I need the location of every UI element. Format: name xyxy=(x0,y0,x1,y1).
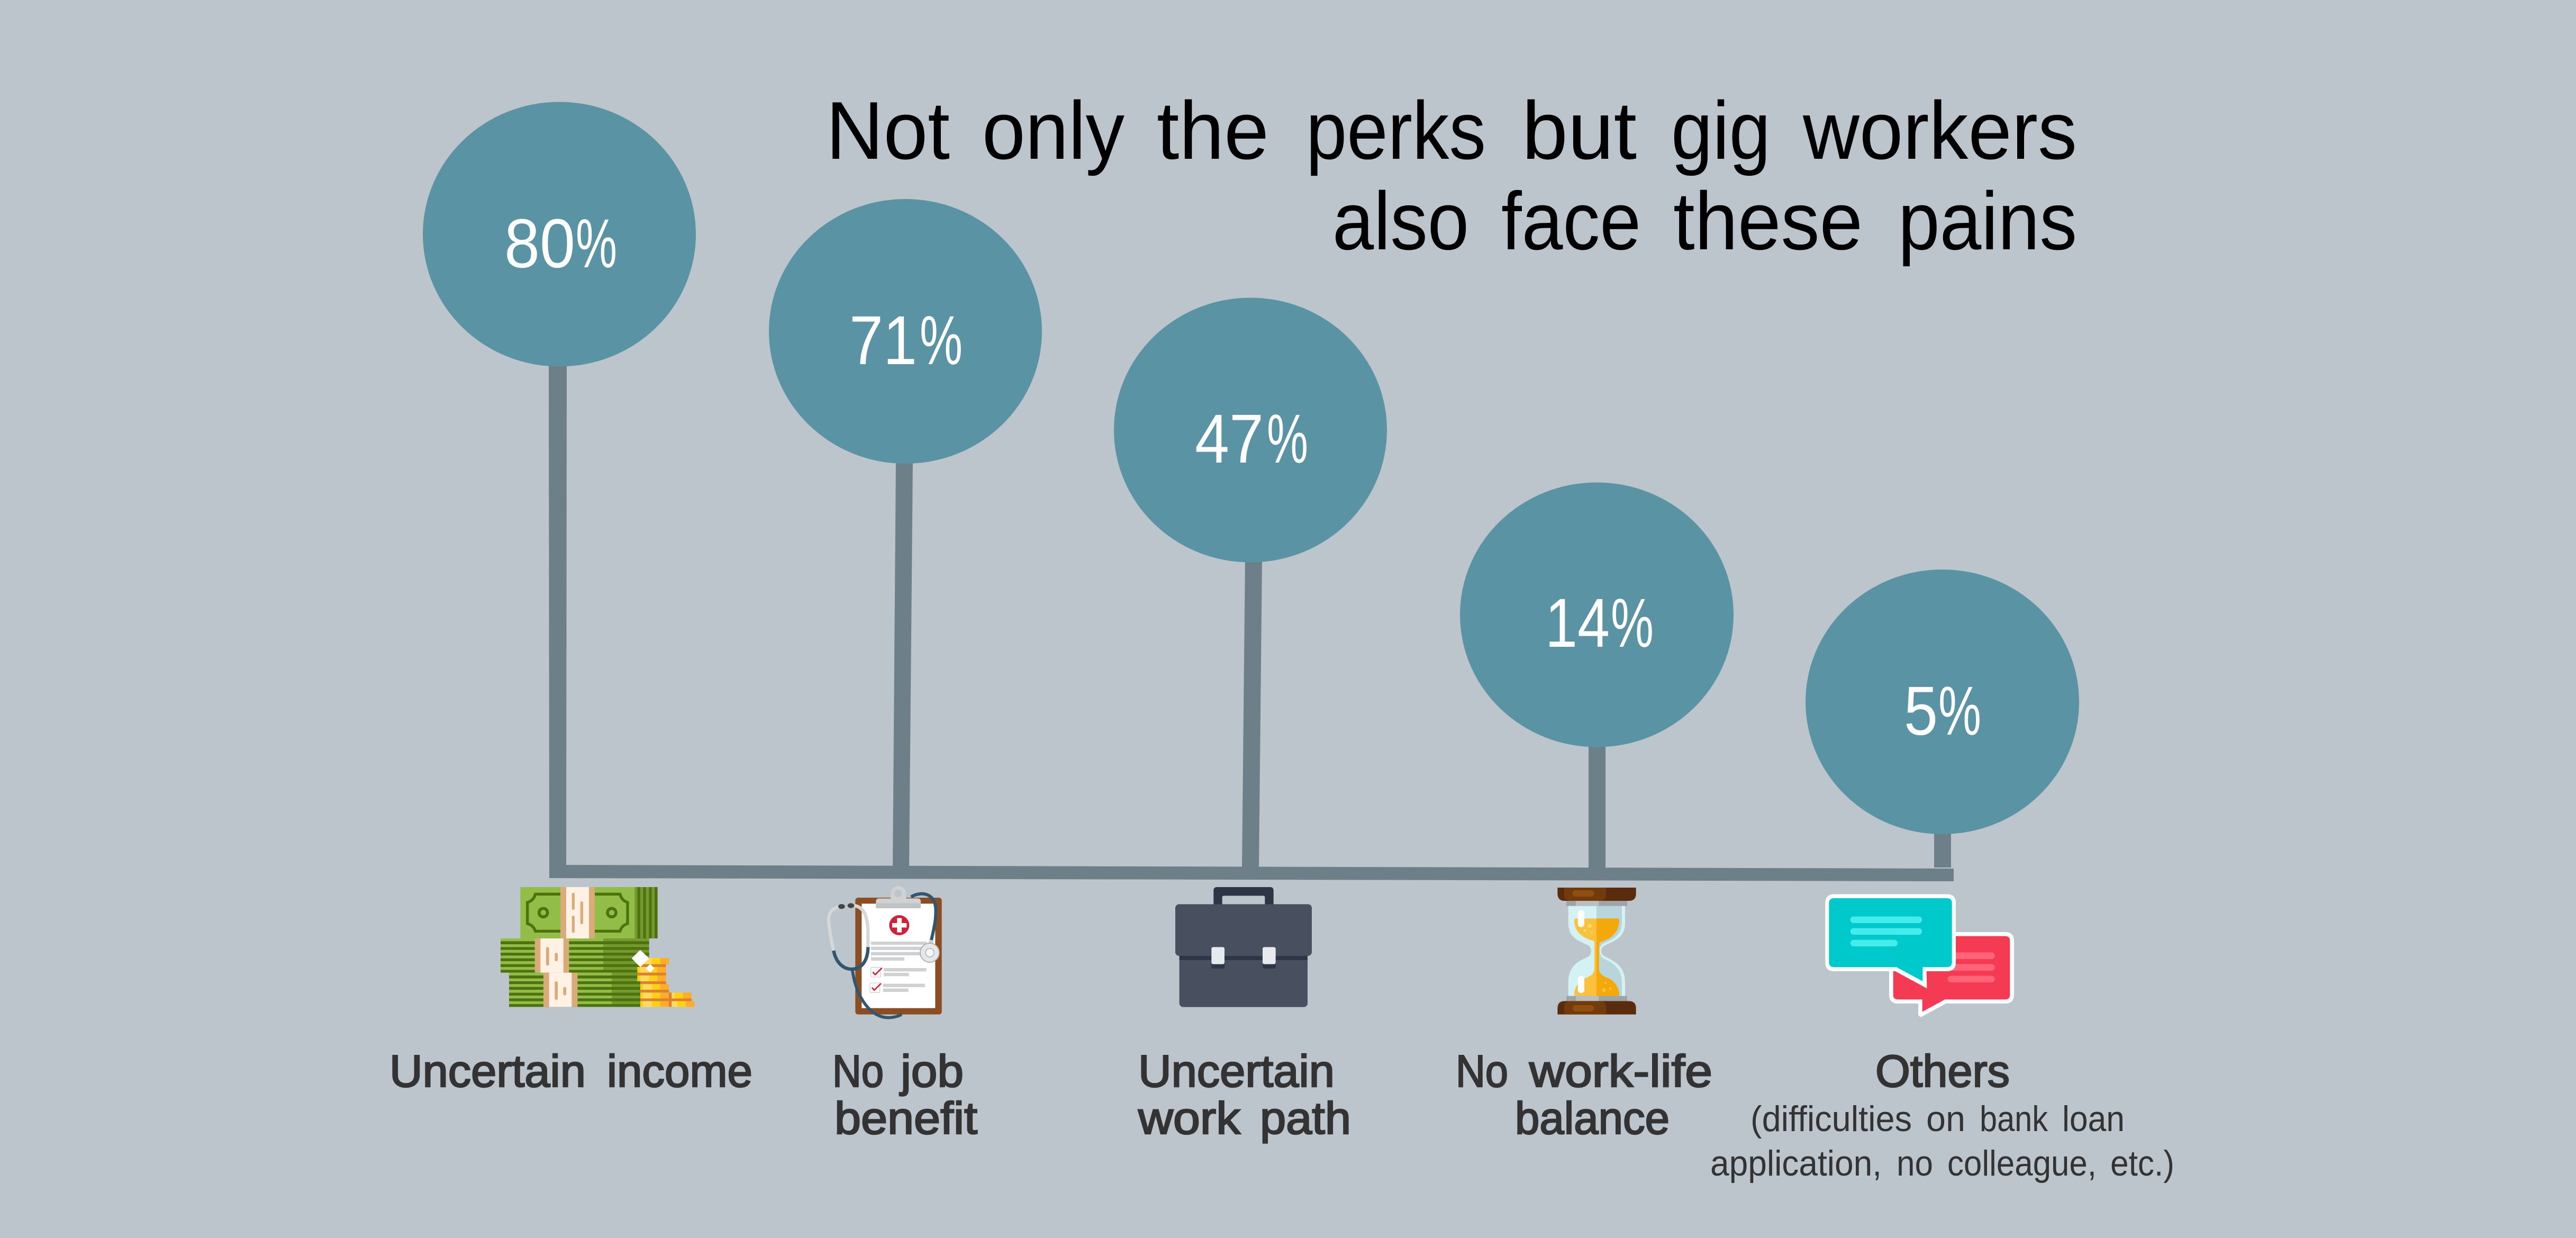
title: but xyxy=(1522,85,1637,176)
label: others: Others xyxy=(1875,1046,2010,1097)
bubble: 5% xyxy=(1806,570,2079,834)
label: others detail: on xyxy=(1926,1099,1965,1139)
label: uncertain income xyxy=(389,1046,752,1097)
label: others detail: no xyxy=(1897,1143,1933,1183)
label: uncertain work path xyxy=(1138,1046,1351,1144)
icon: hourglass xyxy=(1557,888,1636,1015)
title xyxy=(826,85,2077,267)
bubble: 14% xyxy=(1460,483,1734,747)
label: others detail: etc.) xyxy=(2110,1143,2174,1183)
title: workers xyxy=(1802,85,2077,176)
title: only xyxy=(982,85,1124,176)
label: others xyxy=(1710,1046,2174,1183)
label: uncertain work path: Uncertain xyxy=(1138,1046,1335,1097)
label: uncertain work path: path xyxy=(1260,1094,1351,1144)
label: no work-life balance: work-life xyxy=(1529,1046,1712,1097)
bubble: 71%: % xyxy=(920,301,963,379)
bubble: 47%: % xyxy=(1267,400,1308,477)
icon: money stacks and coins xyxy=(501,887,695,1007)
label: uncertain work path: work xyxy=(1138,1094,1241,1144)
bubble: 47%: 47 xyxy=(1195,400,1264,477)
stem: no job benefit xyxy=(893,460,913,868)
bubble: 80%: % xyxy=(576,204,617,282)
icon: medical clipboard with stethoscope xyxy=(829,886,942,1018)
icon: briefcase xyxy=(1175,887,1312,1007)
bubble: 71%: 71 xyxy=(849,301,917,379)
label: others detail: application, xyxy=(1710,1143,1882,1183)
label: no work-life balance: balance xyxy=(1515,1094,1670,1144)
stem: uncertain income xyxy=(549,365,567,868)
label: others detail: bank xyxy=(1980,1099,2048,1139)
stem: others xyxy=(1934,831,1951,867)
label: no job benefit xyxy=(832,1046,977,1144)
bubble: 14%: % xyxy=(1611,584,1654,662)
bubble: 47% xyxy=(1114,297,1387,562)
label: no work-life balance: No xyxy=(1456,1046,1508,1097)
icon: chat bubbles xyxy=(1825,894,2014,1017)
bubble: 14%: 14 xyxy=(1545,584,1610,662)
bubble: 80%: 80 xyxy=(504,204,575,282)
label: others detail: (difficulties xyxy=(1750,1099,1912,1139)
stem: uncertain work path xyxy=(1242,558,1262,868)
stem: no work-life balance xyxy=(1589,744,1606,869)
chart: lollipop chart of pains xyxy=(423,102,2079,881)
title: also xyxy=(1332,175,1469,267)
label: no job benefit: benefit xyxy=(835,1094,977,1144)
title: perks xyxy=(1306,85,1486,176)
title: Not xyxy=(826,85,950,176)
label: others detail: colleague, xyxy=(1947,1143,2097,1183)
chart baseline xyxy=(549,865,1954,881)
label: uncertain income: income xyxy=(607,1046,752,1097)
label: no job benefit: No xyxy=(832,1046,884,1097)
label: no work-life balance xyxy=(1456,1046,1712,1144)
bubble: 5%: % xyxy=(1938,672,1981,749)
label: uncertain income: Uncertain xyxy=(389,1046,586,1097)
title: face xyxy=(1501,175,1641,267)
title: gig xyxy=(1671,85,1771,176)
title: pains xyxy=(1898,175,2077,267)
title: the xyxy=(1157,85,1269,176)
title: these xyxy=(1673,175,1863,267)
bubble: 80% xyxy=(423,102,696,366)
label: others detail xyxy=(1710,1099,2174,1183)
bubble: 71% xyxy=(769,199,1042,464)
label: no job benefit: job xyxy=(899,1046,964,1097)
label: others detail: loan xyxy=(2062,1099,2125,1139)
bubble: 5%: 5 xyxy=(1904,672,1938,749)
